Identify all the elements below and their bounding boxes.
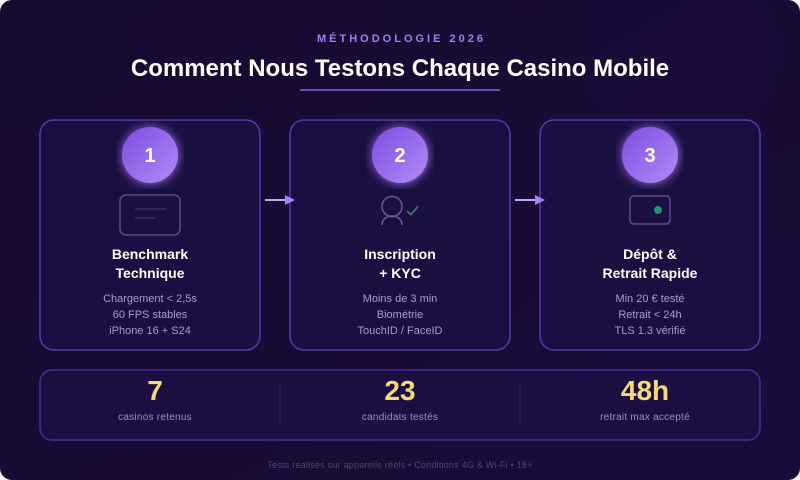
details: step 3 — [615, 293, 685, 337]
heading: step 2: Inscription — [364, 246, 436, 262]
step number 2: 2 — [394, 145, 406, 167]
arrow 1 to 2 — [265, 195, 295, 205]
details: step 2: Biométrie — [377, 309, 423, 321]
details: step 2: TouchID / FaceID — [358, 325, 443, 337]
icon: screen benchmark — [120, 195, 180, 235]
details: step 3: Min 20 € testé — [615, 293, 685, 305]
heading: step 3 — [603, 246, 698, 281]
heading: step 1: Technique — [116, 265, 185, 281]
arrow 2 to 3 — [515, 195, 545, 205]
icon: wallet — [630, 196, 670, 224]
heading: step 1: Benchmark — [112, 246, 188, 262]
step number 1: 1 — [144, 145, 156, 167]
details: step 1 — [103, 293, 197, 337]
details: step 2: Moins de 3 min — [363, 293, 437, 305]
step number 3: 3 — [644, 145, 656, 167]
icon: user with check — [382, 196, 418, 225]
details: step 1: 60 FPS stables — [113, 309, 188, 321]
heading: step 2 — [364, 246, 436, 281]
heading: step 3: Retrait Rapide — [603, 265, 698, 281]
stat: casinos: 7 — [147, 375, 163, 406]
heading: step 3: Dépôt & — [623, 246, 677, 262]
heading: step 2: + KYC — [379, 265, 421, 281]
stat: casinos — [118, 375, 192, 423]
title underline — [300, 89, 500, 91]
panel: step 3 — [540, 120, 760, 350]
stat: casinos: casinos retenus — [118, 412, 192, 423]
heading: step 1 — [112, 246, 188, 281]
details: step 3: TLS 1.3 vérifié — [615, 325, 685, 337]
footer note: Tests réalisés sur appareils réels • Conditions 4G & Wi-Fi • 18+ — [267, 460, 533, 470]
stat: withdrawal — [600, 375, 690, 423]
stat: candidates: candidats testés — [362, 412, 438, 423]
details: step 1: Chargement < 2,5s — [103, 293, 197, 305]
details: step 2 — [358, 293, 443, 337]
title: Comment Nous Testons Chaque Casino Mobile — [131, 55, 669, 82]
stat: candidates: 23 — [384, 375, 416, 406]
stat: candidates — [362, 375, 438, 423]
details: step 3: Retrait < 24h — [618, 309, 682, 321]
panel: step 2 — [290, 120, 510, 350]
eyebrow: MÉTHODOLOGIE 2026 — [317, 32, 486, 45]
details: step 1: iPhone 16 + S24 — [109, 325, 191, 337]
step number 2 — [372, 127, 428, 183]
stat: withdrawal: retrait max accepté — [600, 412, 690, 423]
decorative circle — [580, 0, 780, 150]
panel: stats — [40, 370, 760, 440]
panel: step 1 — [40, 120, 260, 350]
step number 1 — [122, 127, 178, 183]
step number 3 — [622, 127, 678, 183]
stat: withdrawal: 48h — [621, 375, 669, 406]
